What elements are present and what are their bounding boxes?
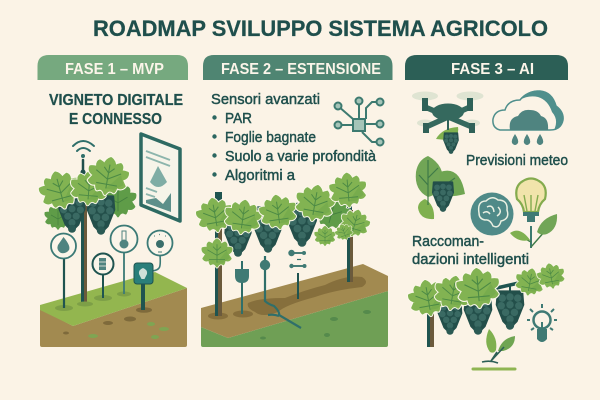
icon: lightbulb with leaves — [510, 178, 557, 248]
icon: drone with grapes — [412, 92, 484, 154]
vine: fase 1 — [37, 155, 135, 306]
sensor: sign station — [134, 263, 153, 313]
title: ROADMAP SVILUPPO SISTEMA AGRICOLO — [93, 16, 548, 41]
sensor: data logger — [92, 254, 114, 301]
icon: plant with grapes — [416, 156, 465, 219]
heading: fase 2: FASE 2 – ESTENSIONE — [221, 61, 381, 78]
sensor: thermometer — [110, 226, 138, 296]
text: sensori avanzati list: Foglie bagnate — [225, 130, 316, 146]
ground: fase 1 — [40, 272, 187, 347]
sensors and irrigation pipe — [235, 250, 306, 328]
text: raccomandazioni intelligenti: dazioni intelligenti — [412, 252, 529, 268]
text: sensori avanzati list: Algoritmi a — [225, 168, 296, 184]
icon: seedling — [473, 329, 515, 369]
icon: idea lightbulb — [527, 304, 557, 342]
text: previsioni meteo: Previsioni meteo — [466, 153, 568, 169]
text: vigneto digitale: E CONNESSO — [69, 111, 162, 128]
panel: fase 1 — [37, 55, 188, 347]
heading: fase 1: FASE 1 – MVP — [65, 61, 164, 78]
vine trellis: fase 2 — [195, 172, 371, 316]
text: raccomandazioni intelligenti — [412, 234, 529, 268]
text: sensori avanzati list — [211, 92, 377, 184]
icon: network chip — [334, 98, 384, 146]
text: raccomandazioni intelligenti: Raccoman- — [412, 234, 484, 250]
icon: rain cloud — [493, 90, 563, 145]
text: vigneto digitale: VIGNETO DIGITALE — [49, 92, 183, 109]
panel: fase 3 — [405, 55, 568, 369]
icon: brain badge — [470, 192, 514, 236]
heading: fase 2 — [203, 55, 392, 80]
ground: fase 2 — [201, 264, 388, 347]
heading: fase 1 — [38, 55, 188, 80]
panel: fase 2 — [195, 55, 392, 347]
heading: fase 3 — [405, 55, 568, 80]
text: vigneto digitale — [49, 92, 183, 128]
heading: fase 3: FASE 3 – AI — [451, 61, 534, 78]
vine: fase 3 — [407, 262, 566, 347]
icon: smartphone — [141, 134, 180, 221]
sensor: water drop — [51, 234, 76, 311]
text: sensori avanzati list: Suolo a varie profondità — [225, 149, 377, 165]
sensor: light gauge — [148, 230, 172, 271]
text: sensori avanzati list: PAR — [225, 111, 252, 127]
text: sensori avanzati list: Sensori avanzati — [211, 92, 320, 108]
icon: wifi antenna — [73, 141, 94, 185]
